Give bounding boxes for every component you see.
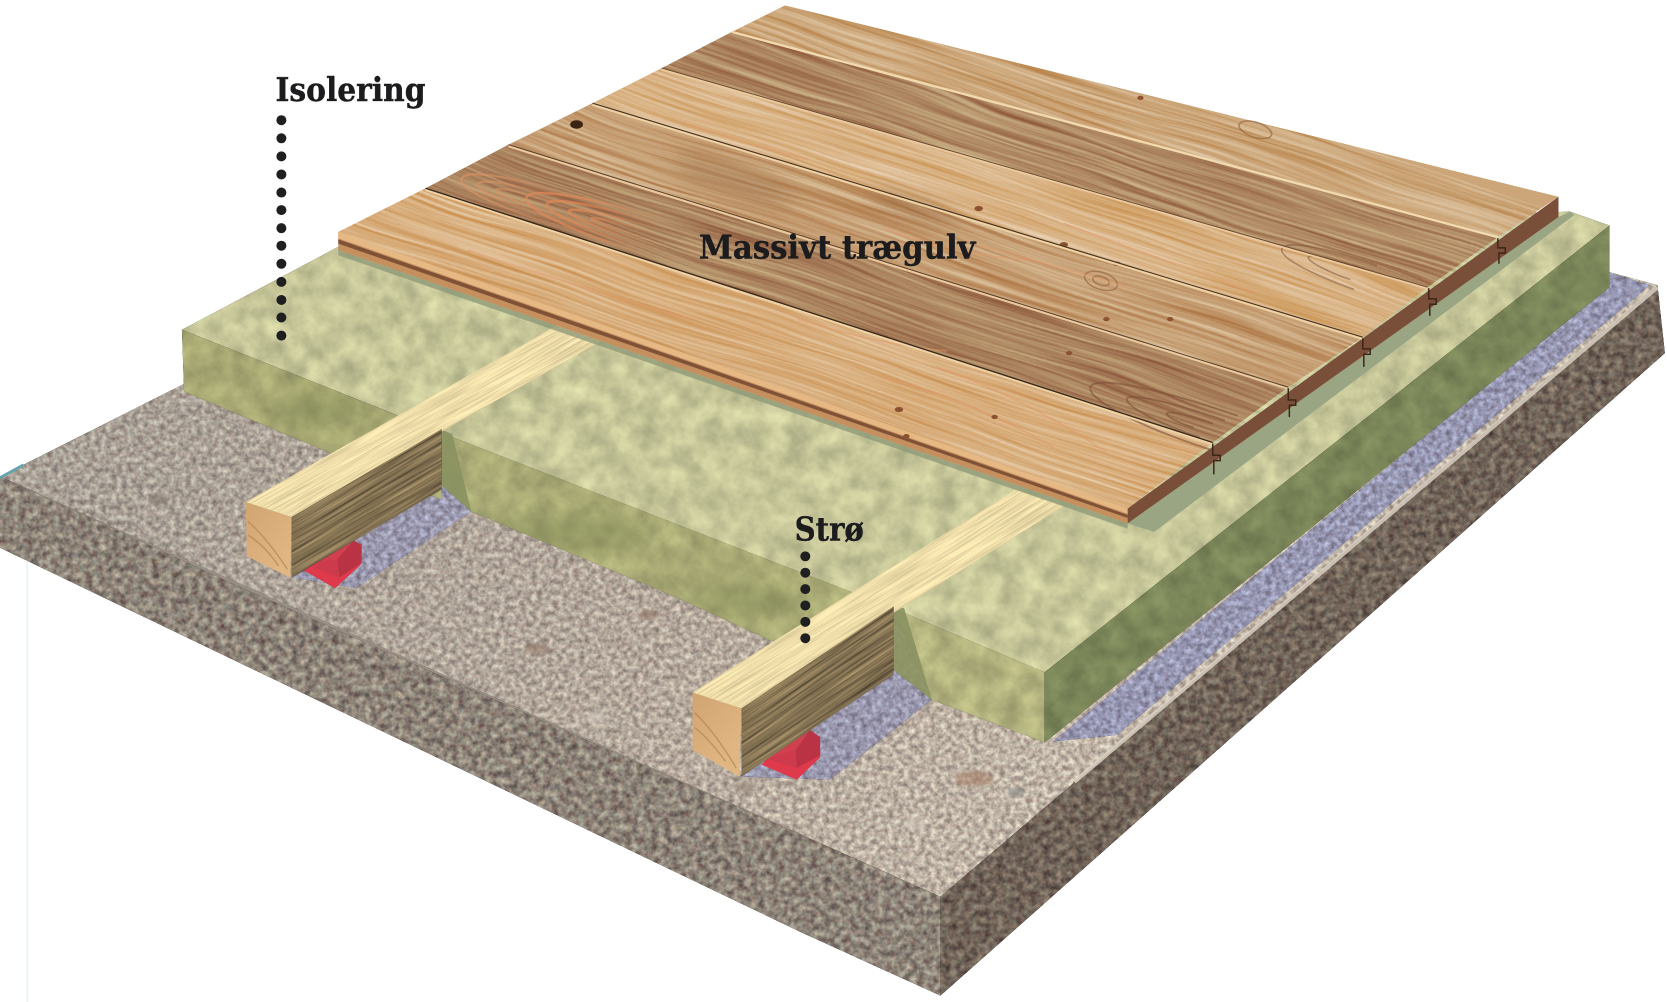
leader dots: Strø — [800, 551, 810, 643]
cathedral grain: plank 3 knot ring — [1082, 117, 1274, 294]
joist: left — [246, 324, 604, 578]
concrete right side face — [940, 285, 1665, 996]
panel: insulation — [182, 212, 1610, 742]
insulation top surface — [182, 212, 1610, 672]
cathedral grain: plank 2 right — [1083, 371, 1238, 454]
concrete top surface — [0, 271, 1657, 897]
cathedral grain: plank 2 centre — [521, 179, 664, 257]
slab backing — [0, 271, 1665, 996]
floor shadow on insulation — [1128, 212, 1574, 532]
plank seams — [426, 32, 1498, 444]
floor right edge — [1128, 197, 1558, 523]
joist end — [693, 692, 741, 776]
floor planks — [338, 5, 1558, 508]
insulation dark blotches — [271, 394, 798, 616]
leader dots: Isolering — [276, 115, 286, 341]
cathedral grain: plank 5 right — [1277, 236, 1377, 294]
pedestal: left red support — [303, 538, 362, 588]
panel: concrete slab — [0, 271, 1665, 996]
joist top — [246, 324, 604, 517]
insulation right side face — [1045, 226, 1610, 742]
label: Strø — [795, 509, 864, 643]
joist end — [246, 502, 291, 578]
shadows on concrete — [293, 272, 1650, 780]
panel: solid wood floor — [338, 5, 1558, 524]
teal edge — [0, 465, 23, 478]
label: Massivt trægulv: Massivt trægulv — [699, 227, 976, 266]
heading: Strø: Strø — [795, 509, 864, 548]
joist: right — [693, 489, 1065, 776]
insulation right block front face — [894, 608, 1045, 742]
wood grain texture — [342, 6, 1542, 507]
plank tone patches — [676, 156, 956, 229]
joist side — [741, 606, 894, 776]
floor front edge — [338, 232, 1128, 523]
joist top — [693, 489, 1065, 708]
joist side — [291, 429, 441, 578]
concrete aggregate spots — [150, 495, 1179, 830]
cathedral grain: plank 2 left — [457, 163, 580, 230]
heading: Isolering: Isolering — [276, 70, 426, 109]
knots — [570, 96, 1173, 438]
pedestal: right red support — [762, 730, 820, 780]
label: Isolering — [276, 70, 426, 341]
concrete left side face — [0, 477, 940, 996]
insulation left block front face — [182, 330, 441, 500]
concrete light rim — [1074, 287, 1657, 782]
light plank figure — [468, 122, 1255, 452]
shaded block ends — [441, 430, 471, 512]
insulation middle block front face — [441, 433, 894, 670]
tongue and groove marks — [1213, 238, 1505, 474]
